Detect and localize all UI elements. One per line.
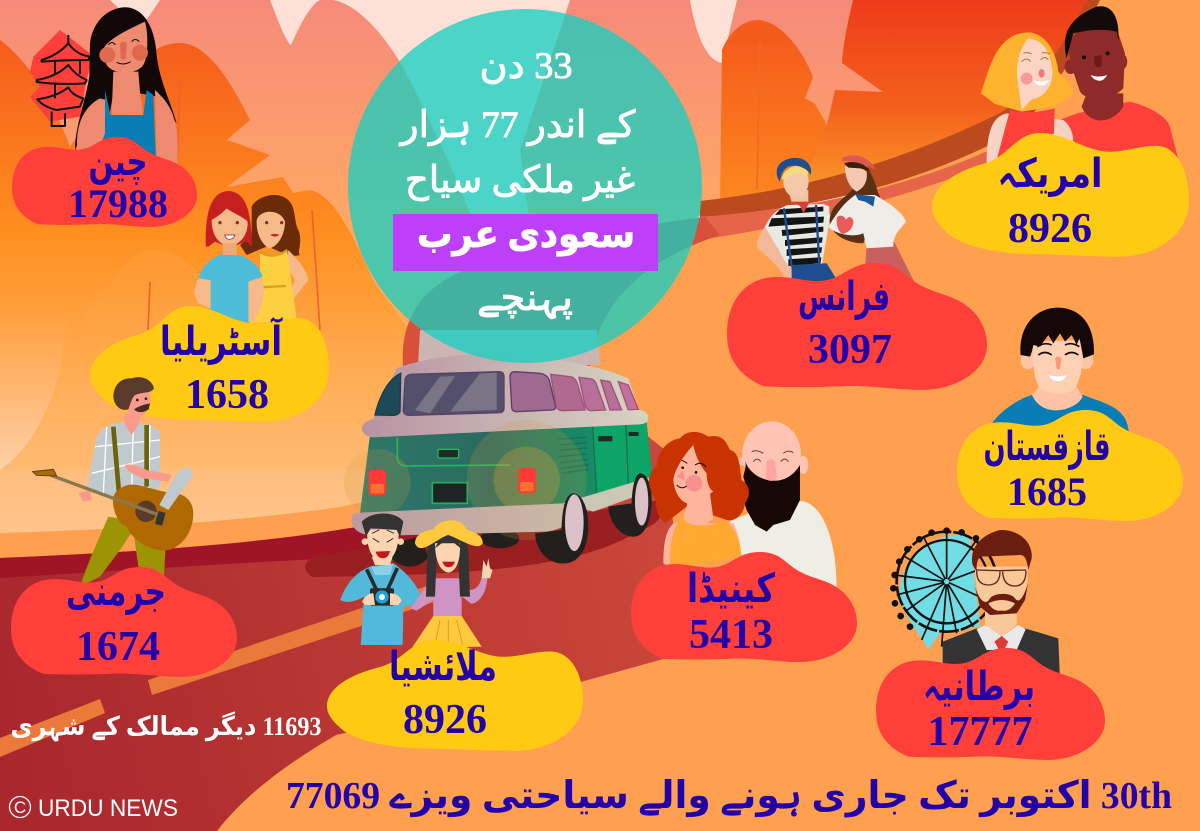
visitor count: 3097 bbox=[808, 327, 892, 373]
copyright symbol: C bbox=[14, 798, 26, 817]
van far wheels bbox=[481, 528, 519, 548]
main road bbox=[0, 430, 680, 831]
van lower body bbox=[360, 423, 652, 513]
blob bbox=[327, 640, 583, 751]
panel: USA bbox=[932, 6, 1189, 257]
orange tree top right centre bbox=[720, 20, 827, 205]
salmon hills bbox=[0, 0, 500, 533]
panel: Malaysia bbox=[327, 514, 583, 751]
figure: woman bbox=[75, 7, 178, 165]
blob bbox=[727, 263, 987, 390]
orange trees left bbox=[0, 40, 430, 470]
icon: pagoda bbox=[30, 30, 90, 126]
country name: برطانیہ bbox=[923, 664, 1035, 710]
headline line 5: پہنچے bbox=[477, 278, 573, 319]
panel: Germany bbox=[11, 377, 237, 677]
visitor count: 8926 bbox=[403, 697, 487, 743]
road winding up bbox=[403, 217, 720, 366]
blob bbox=[631, 552, 857, 662]
bumper bbox=[352, 503, 572, 536]
left ground bbox=[0, 300, 420, 533]
visitor count: 8926 bbox=[1008, 206, 1092, 252]
country name: ملائشیا bbox=[389, 644, 497, 689]
figure: couple bbox=[649, 421, 837, 590]
other countries note: 11693 دیگر ممالک کے شہری bbox=[10, 711, 321, 742]
blob bbox=[876, 648, 1105, 760]
figure: bearded man bbox=[943, 530, 1060, 680]
tail lights bbox=[344, 420, 587, 540]
visitor count: 17777 bbox=[928, 709, 1032, 755]
country name: امریکہ bbox=[998, 151, 1102, 197]
visitor count: 1674 bbox=[76, 624, 160, 670]
pale glade left bbox=[0, 300, 70, 470]
copyright logo bbox=[10, 795, 178, 822]
main message circle bbox=[348, 9, 702, 363]
panel: China bbox=[12, 7, 197, 227]
headline line 3: غیر ملکی سیاح bbox=[405, 160, 635, 201]
country name: آسٹریلیا bbox=[160, 316, 283, 365]
copyright symbol bbox=[10, 796, 30, 818]
van windows bbox=[375, 372, 638, 415]
figure: tourist couple bbox=[340, 514, 493, 648]
blob bbox=[11, 567, 237, 677]
far hill right of centre bbox=[520, 0, 853, 300]
blob bbox=[90, 306, 329, 422]
blob bbox=[12, 137, 197, 227]
blob bbox=[932, 133, 1189, 257]
figure: two women bbox=[194, 191, 308, 323]
road dashes bbox=[0, 585, 440, 757]
distant road bands bbox=[700, 0, 1100, 217]
rear trim and plate bbox=[397, 437, 510, 466]
headline line 1: 33 دن bbox=[480, 46, 572, 87]
window glare bbox=[415, 373, 497, 413]
total visas headline: 30th اکتوبر تک جاری ہونے والے سیاحتی ویزے 77069 bbox=[286, 775, 1172, 818]
panel: France bbox=[727, 155, 987, 390]
panel: Australia bbox=[90, 191, 329, 422]
visitor count: 1685 bbox=[1007, 469, 1087, 514]
visitor count: 17988 bbox=[68, 181, 168, 226]
wheels bbox=[535, 493, 588, 564]
country name: جرمنی bbox=[66, 569, 166, 615]
peach star hill bbox=[737, 0, 883, 125]
illustration: camper van bbox=[344, 354, 653, 567]
country name: چین bbox=[88, 139, 148, 185]
van roof bbox=[373, 354, 640, 418]
visitor count: 1658 bbox=[185, 372, 269, 418]
highlighted country name: سعودی عرب bbox=[417, 214, 635, 256]
highlighted country box bbox=[393, 214, 658, 271]
country name: قازقستان bbox=[984, 424, 1110, 470]
panel: Canada bbox=[631, 421, 857, 662]
figure: young man bbox=[992, 308, 1129, 437]
hot red hill bbox=[780, 0, 1090, 192]
figure: couple bbox=[981, 6, 1179, 163]
headline line 2: کے اندر 77 ہزار bbox=[398, 105, 636, 146]
panel: Kazakhstan bbox=[957, 308, 1183, 521]
country name: کینیڈا bbox=[687, 566, 776, 611]
luggage on van roof bbox=[418, 330, 600, 365]
brand name: URDU NEWS bbox=[38, 795, 178, 822]
waist belt bbox=[362, 410, 648, 437]
visitor count: 5413 bbox=[689, 612, 773, 658]
figure: mime couple bbox=[757, 155, 917, 290]
icon: Ferris wheel bbox=[890, 527, 997, 649]
lower pale tree bbox=[80, 250, 240, 350]
country name: فرانس bbox=[798, 274, 890, 320]
figure: guitarist bbox=[33, 377, 193, 587]
van shadow bbox=[305, 500, 663, 577]
panel: United Kingdom bbox=[876, 527, 1105, 760]
blob bbox=[957, 410, 1183, 521]
